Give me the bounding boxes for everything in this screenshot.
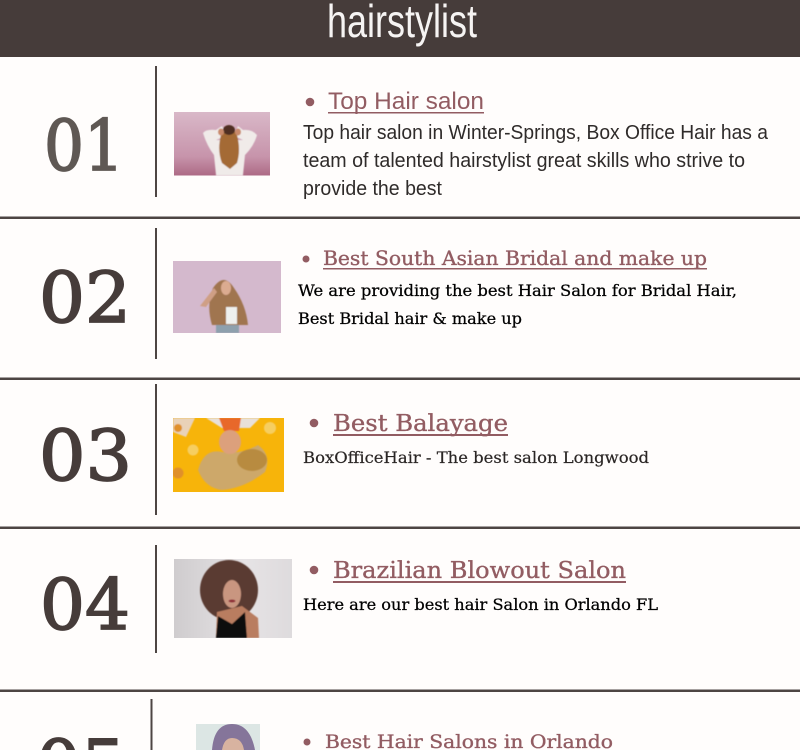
photo: woman from behind on pink wall [174, 112, 270, 176]
text block row 2: Best Bridal hair & make up [298, 310, 522, 328]
row 1 [44, 66, 769, 200]
number 04: 04 [40, 564, 130, 646]
photo: blonde woman on yellow background [172, 418, 284, 492]
heading: Best Balayage: Best Balayage [333, 409, 508, 437]
text block row 4: Here are our best hair Salon in Orlando FL [303, 596, 658, 614]
text block row 3: BoxOfficeHair - The best salon Longwood [303, 449, 649, 467]
number 03: 03 [39, 415, 132, 497]
row 2 [39, 228, 737, 359]
photo: woman with dark curly hair [174, 559, 292, 638]
row 5 [150, 699, 613, 750]
text block row 2 [298, 282, 737, 328]
heading: Best South Asian Bridal and make up: Best South Asian Bridal and make up [323, 247, 707, 270]
row 3 [39, 384, 649, 515]
heading: Brazilian Blowout Salon: Brazilian Blowout Salon [333, 556, 626, 584]
header band [0, 0, 800, 57]
number 01: 01 [44, 105, 124, 187]
heading: Top Hair salon: Top Hair salon [328, 88, 484, 115]
text block row 1: team of talented hairstylist great skills who strive to [303, 150, 745, 172]
row 4 [40, 545, 658, 653]
text block row 1: Top hair salon in Winter-Springs, Box Office Hair has a [303, 122, 769, 144]
text block row 1 [303, 122, 769, 200]
text block row 1: provide the best [303, 178, 442, 200]
photo: woman with curly hair on lilac wall [173, 261, 281, 333]
text block row 2: We are providing the best Hair Salon for Bridal Hair, [298, 282, 737, 300]
photo: woman with purple hair [196, 724, 260, 750]
number 02: 02 [39, 257, 131, 339]
